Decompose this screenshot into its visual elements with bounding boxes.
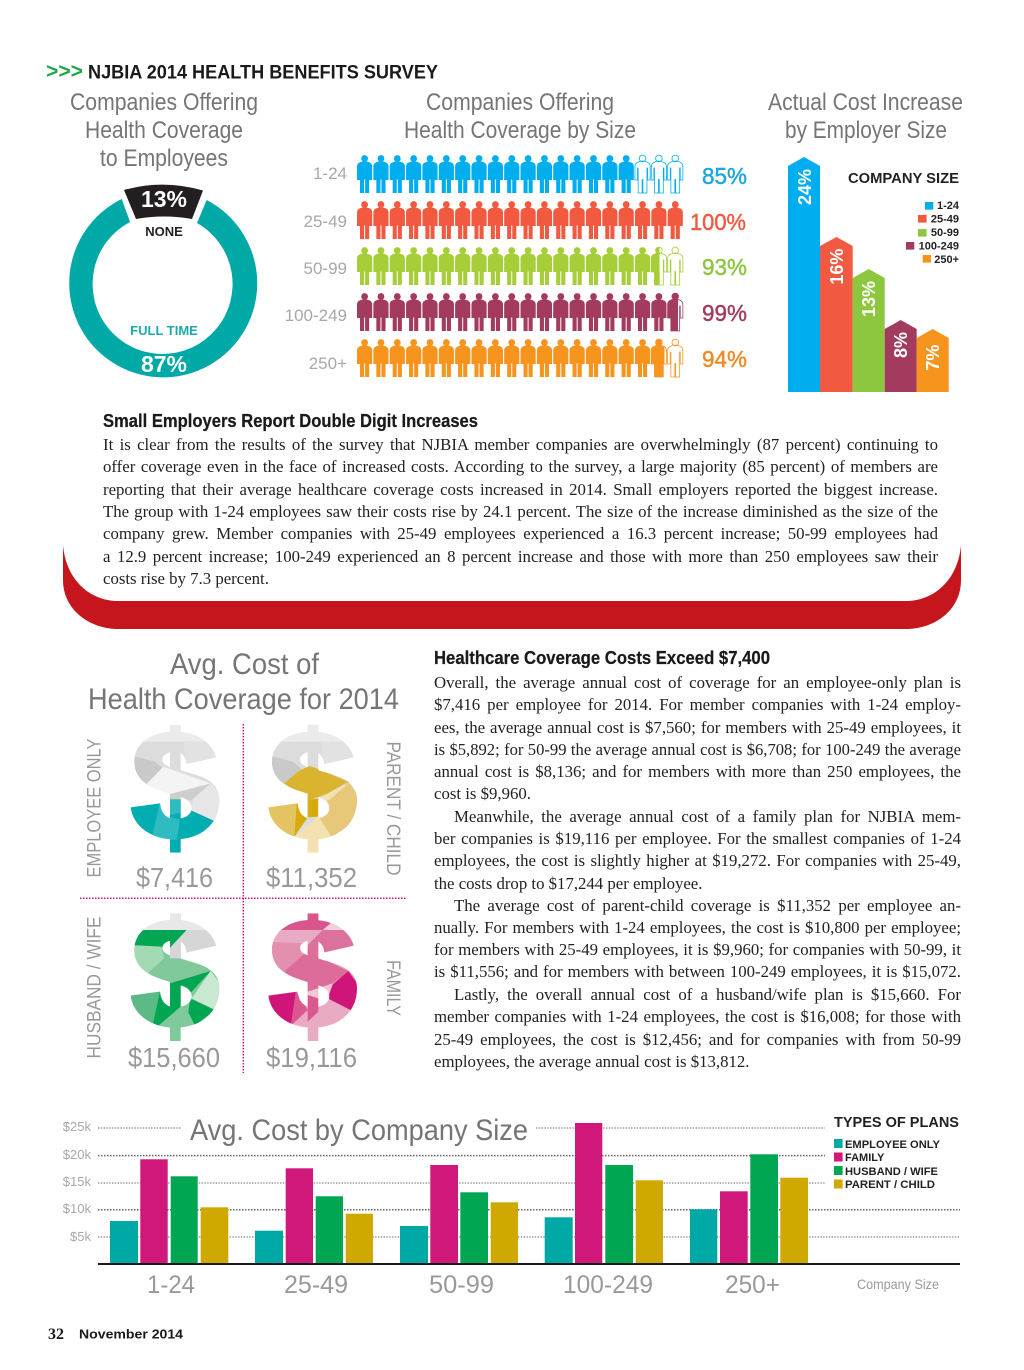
- heading: actual cost increase: [768, 89, 963, 144]
- heading: small employers: Small Employers Report Double Digit Increases: [103, 410, 478, 431]
- text block: small employers article: offer coverage even in the face of increased costs. According to the survey, a large majority (85 percent) of members are: [103, 457, 938, 476]
- text block: healthcare coverage costs article: ees, the average annual cost is $7,560; for members with 25-49 employees, it: [434, 718, 961, 737]
- row 250+: 94%: [309, 339, 747, 377]
- section title: >>>: [46, 60, 83, 83]
- row 1-24: 85%: 85%: [702, 163, 747, 189]
- y axis labels: $15k: [63, 1174, 91, 1189]
- text block: healthcare coverage costs article: Meanwhile, the average annual cost of a family plan for NJBIA mem-: [454, 807, 961, 826]
- arrow bar chart: cost increase by size: [788, 157, 949, 392]
- row 25-49: 100%: 100%: [690, 209, 746, 235]
- text block: healthcare coverage costs article: cost is $9,960.: [434, 784, 531, 803]
- legend: company size: 25-49: [931, 214, 959, 226]
- legend: types of plans: TYPES OF PLANS: [834, 1115, 959, 1131]
- donut chart: coverage: FULL TIME: [130, 323, 198, 338]
- icon: dollar family: [268, 913, 357, 1041]
- donut chart: coverage: [69, 185, 257, 377]
- bars 25-49: [255, 1168, 373, 1264]
- heading: coverage by size: Health Coverage by Size: [404, 117, 636, 144]
- heading: coverage by size: Companies Offering: [426, 89, 614, 116]
- bar 250+: 7%: 7%: [923, 345, 943, 371]
- legend: types of plans: HUSBAND / WIFE: [845, 1166, 938, 1178]
- donut chart: coverage: NONE: [145, 224, 183, 239]
- legend: types of plans: EMPLOYEE ONLY: [845, 1139, 941, 1151]
- text block: healthcare coverage costs article: $7,416 per employee for 2014. For member companies with 1-24 employ-: [434, 695, 961, 714]
- heading: companies offering coverage: [70, 89, 258, 172]
- row 25-49: 100%: 25-49: [304, 212, 347, 231]
- ring segment: none 13%: [124, 185, 203, 219]
- label: family: FAMILY: [382, 960, 403, 1016]
- red swoosh divider: [63, 545, 961, 629]
- pictogram chart: coverage by size: [285, 155, 747, 377]
- bar 50-99: 13%: [853, 269, 885, 392]
- chart title: Avg. Cost by Company Size: [190, 1114, 528, 1147]
- text block: small employers article: reporting that their average healthcare coverage costs increased in 2014. Small employers reported the biggest increase.: [103, 480, 938, 499]
- x axis labels: Company Size: [857, 1276, 939, 1292]
- heading: actual cost increase: Actual Cost Increase: [768, 89, 963, 116]
- text block: healthcare coverage costs article: the costs drop to $17,244 per employee.: [434, 874, 702, 893]
- icon: dollar parent child: [268, 725, 357, 852]
- label: parent child: PARENT / CHILD: [382, 742, 403, 876]
- row 50-99: 93%: 50-99: [304, 259, 347, 278]
- donut chart: coverage: 87%: [141, 351, 187, 377]
- legend: types of plans: PARENT / CHILD: [845, 1179, 935, 1191]
- bar 250+: 7%: [917, 329, 949, 392]
- bar 1-24: 24%: 24%: [795, 169, 815, 205]
- bar 100-249: 8%: 8%: [891, 332, 911, 358]
- footer: [48, 1326, 184, 1343]
- bar 25-49: 16%: 16%: [827, 249, 847, 285]
- x axis labels: 50-99: [429, 1271, 494, 1299]
- value: parent child: $11,352: [266, 862, 357, 893]
- row 1-24: 85%: 1-24: [313, 164, 347, 183]
- row 100-249: 99%: 99%: [702, 300, 747, 326]
- text block: healthcare coverage costs article: nually. For members with 1-24 employees, the cost is $10,800 per employee;: [434, 918, 961, 937]
- text block: healthcare coverage costs article: ber companies is $19,116 per employee. For the smallest companies of 1-24: [434, 829, 961, 848]
- row 250+: 94%: 250+: [309, 354, 347, 373]
- text block: healthcare coverage costs article: Lastly, the overall annual cost of a husband/wife plan is $15,660. For: [454, 985, 961, 1004]
- y axis labels: $10k: [63, 1201, 91, 1216]
- row 100-249: 99%: [285, 293, 747, 331]
- heading: healthcare coverage costs: Healthcare Coverage Costs Exceed $7,400: [434, 647, 770, 668]
- row 250+: 94%: 94%: [702, 346, 747, 372]
- y axis labels: $25k: [63, 1119, 91, 1134]
- text block: healthcare coverage costs article: 25-49 employees, the cost is $12,456; and for companies with from 50-99: [434, 1030, 961, 1049]
- row 50-99: 93%: [304, 247, 747, 285]
- y axis labels: $5k: [70, 1229, 91, 1244]
- dollar quadrant grid: [80, 724, 406, 1073]
- text block: small employers article: [103, 435, 938, 588]
- bar 50-99: 13%: 13%: [859, 281, 879, 317]
- x axis labels: [147, 1271, 939, 1299]
- value: employee only: $7,416: [136, 862, 213, 893]
- y axis labels: $20k: [63, 1147, 91, 1162]
- text block: healthcare coverage costs article: member companies with 1-24 employees, the cost is $16,008; for those with: [434, 1007, 961, 1026]
- icon: dollar employee only: [130, 725, 220, 853]
- text block: healthcare coverage costs article: is $5,892; for 50-99 the average annual cost is $6,708; for 100-249 the average: [434, 740, 961, 759]
- legend: company size: 1-24: [937, 200, 960, 212]
- x axis labels: 100-249: [563, 1271, 653, 1299]
- legend: company size: 250+: [934, 254, 959, 266]
- x axis labels: 1-24: [147, 1271, 195, 1299]
- text block: small employers article: costs rise by 7.3 percent.: [103, 569, 269, 588]
- row 1-24: 85%: [313, 155, 747, 193]
- legend: company size: 50-99: [931, 227, 959, 239]
- footer: 32: [48, 1326, 64, 1343]
- heading: companies offering coverage: Companies Offering: [70, 89, 258, 116]
- x axis labels: 250+: [725, 1271, 780, 1299]
- text block: healthcare coverage costs article: employees, the average annual cost is $13,812.: [434, 1052, 749, 1071]
- text block: small employers article: It is clear from the results of the survey that NJBIA member companies are overwhelmingly (87 percent) continuing to: [103, 435, 938, 454]
- x axis labels: 25-49: [284, 1271, 348, 1299]
- bar 25-49: 16%: [820, 237, 853, 392]
- text block: healthcare coverage costs article: is $11,556; and for members with between 100-249 employees, it is $15,072.: [434, 962, 961, 981]
- text block: small employers article: a 12.9 percent increase; 100-249 experienced an 8 percent increase and those with more than 250 employees saw their: [103, 547, 938, 566]
- y axis labels: [63, 1119, 91, 1244]
- heading: average cost of coverage: Health Coverage for 2014: [88, 683, 399, 716]
- legend: types of plans: [834, 1115, 959, 1191]
- heading: companies offering coverage: Health Coverage: [85, 117, 243, 144]
- section title: NJBIA 2014 HEALTH BENEFITS SURVEY: [88, 62, 438, 84]
- bar 100-249: 8%: [885, 320, 917, 392]
- icon: dollar husband wife: [130, 913, 220, 1041]
- text block: healthcare coverage costs article: annual cost is $8,136; and for members with more than 250 employees, the: [434, 762, 961, 781]
- text block: healthcare coverage costs article: Overall, the average annual cost of coverage for an employee-only plan is: [434, 673, 961, 692]
- heading: average cost of coverage: [88, 648, 399, 716]
- row 100-249: 99%: 100-249: [285, 306, 347, 325]
- label: employee only: EMPLOYEE ONLY: [84, 738, 106, 878]
- text block: healthcare coverage costs article: for members with 25-49 employees, it is $9,960; for companies with 50-99, it: [434, 940, 961, 959]
- bars 250+: [690, 1154, 808, 1264]
- heading: average cost of coverage: Avg. Cost of: [170, 648, 320, 681]
- heading: actual cost increase: by Employer Size: [785, 117, 947, 144]
- text block: small employers article: company grew. Member companies with 25-49 employees experienced a 16.3 percent increase; 50-99 employees had: [103, 524, 938, 543]
- donut chart: coverage: 13%: [141, 186, 187, 212]
- grouped bar chart: average cost by company size: [63, 1114, 960, 1299]
- legend: company size: [848, 171, 960, 266]
- text block: small employers article: The group with 1-24 employees saw their costs rise by 24.1 percent. The size of the increase diminished as the size of the: [103, 502, 938, 521]
- heading: coverage by size: [404, 89, 636, 144]
- value: husband wife: $15,660: [128, 1042, 220, 1073]
- row 50-99: 93%: 93%: [702, 254, 747, 280]
- legend: types of plans: FAMILY: [845, 1152, 885, 1164]
- footer: November 2014: [79, 1326, 184, 1342]
- bars 1-24: [110, 1159, 228, 1264]
- label: husband wife: HUSBAND / WIFE: [84, 916, 106, 1058]
- text block: healthcare coverage costs article: employees, the cost is slightly higher at $19,272. For companies with 25-49,: [434, 851, 961, 870]
- text block: healthcare coverage costs article: [434, 673, 961, 1071]
- text block: healthcare coverage costs article: The average cost of parent-child coverage is $11,352 per employee an-: [454, 896, 961, 915]
- bars 50-99: [400, 1165, 518, 1264]
- row 25-49: 100%: [304, 201, 746, 239]
- bar 1-24: 24%: [788, 157, 820, 392]
- bars 100-249: [545, 1123, 663, 1264]
- legend: company size: COMPANY SIZE: [848, 171, 959, 187]
- legend: company size: 100-249: [919, 240, 959, 252]
- heading: companies offering coverage: to Employees: [100, 145, 228, 172]
- ring segment: full time 87%: [69, 199, 257, 377]
- value: family: $19,116: [266, 1042, 357, 1073]
